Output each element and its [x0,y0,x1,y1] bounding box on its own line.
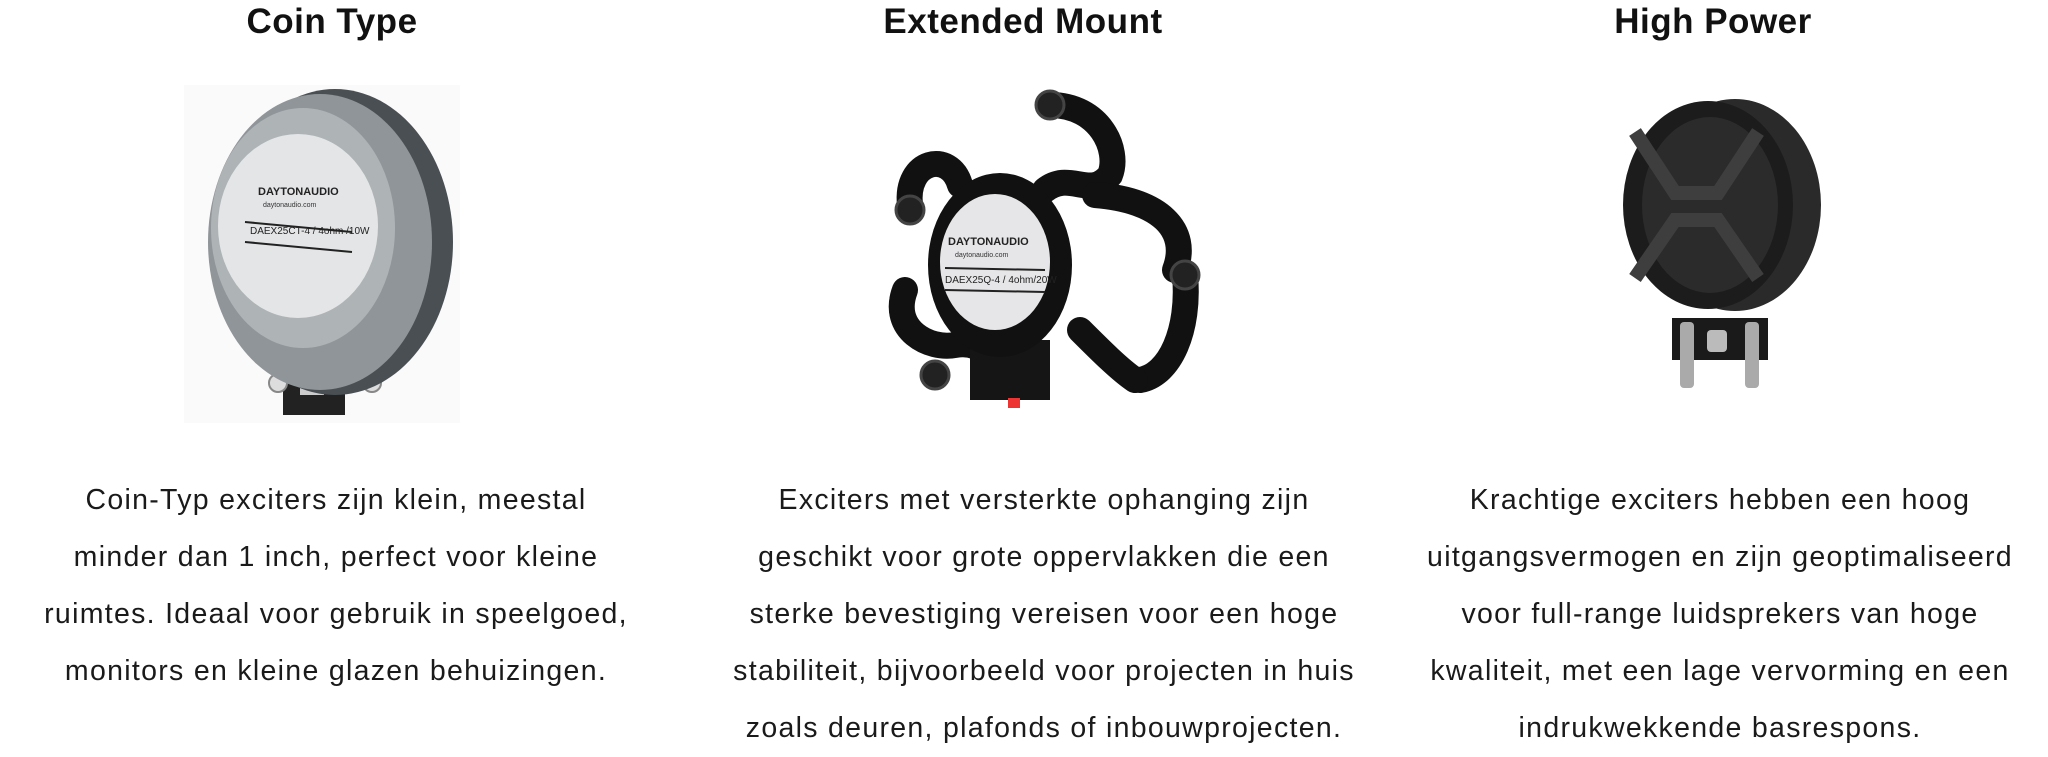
image: extended mount exciter: daytonaudio.com [955,252,1008,259]
title: coin type: Coin Type [246,2,418,41]
text: coin type description: Coin-Typ exciters zijn klein, meestal [85,484,587,516]
image: extended mount exciter [888,90,1200,408]
text: high power description: indrukwekkende basrespons. [1519,712,1921,744]
text: high power description: kwaliteit, met een lage vervorming en een [1430,655,2010,687]
text: coin type description: monitors en kleine glazen behuizingen. [65,655,607,687]
text: coin type description: ruimtes. Ideaal voor gebruik in speelgoed, [44,598,628,630]
image: coin type exciter [208,89,453,415]
text: extended mount description: sterke bevestiging vereisen voor een hoge [750,598,1338,630]
text: coin type description [44,484,628,687]
image: extended mount exciter: DAYTONAUDIO [948,236,1029,248]
image: coin type exciter: DAYTONAUDIO [258,186,339,198]
title: extended mount: Extended Mount [883,2,1163,41]
image: extended mount exciter: DAEX25Q-4 / 4ohm/20W [945,275,1057,286]
text: extended mount description: geschikt voor grote oppervlakken die een [758,541,1330,573]
text: high power description [1427,484,2013,744]
text: extended mount description [733,484,1355,744]
text: extended mount description: Exciters met versterkte ophanging zijn [779,484,1309,516]
image: coin type exciter: daytonaudio.com [263,202,316,209]
text: high power description: uitgangsvermogen en zijn geoptimaliseerd [1427,541,2013,573]
text: extended mount description: zoals deuren, plafonds of inbouwprojecten. [746,712,1342,744]
text: extended mount description: stabiliteit, bijvoorbeeld voor projecten in huis [733,655,1355,687]
title: high power: High Power [1614,2,1812,41]
text: high power description: Krachtige exciters hebben een hoog [1470,484,1970,516]
text: high power description: voor full-range luidsprekers van hoge [1461,598,1979,630]
text: coin type description: minder dan 1 inch, perfect voor kleine [74,541,598,573]
image: high power exciter [1623,99,1821,388]
image: coin type exciter: DAEX25CT-4 / 4ohm /10W [250,226,370,237]
